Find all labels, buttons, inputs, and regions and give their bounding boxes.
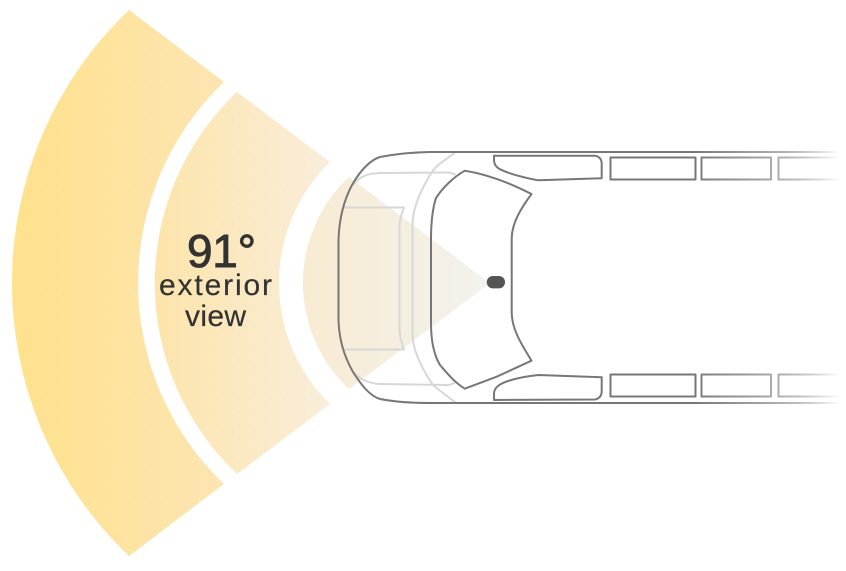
body outline fade xyxy=(700,152,840,403)
label: 91 degrees exterior view xyxy=(159,225,272,333)
bottom side windows xyxy=(610,374,840,396)
body outline xyxy=(338,152,700,403)
middle view band xyxy=(155,92,330,474)
label: 91 degrees exterior view: 91° xyxy=(187,225,256,277)
label: 91 degrees exterior view: exterior xyxy=(159,269,272,302)
windshield xyxy=(431,171,532,389)
camera dot xyxy=(487,276,505,288)
light interior lines xyxy=(345,154,455,402)
bottom mirror panel xyxy=(494,375,602,400)
label: 91 degrees exterior view: view xyxy=(185,300,246,333)
inner view cone xyxy=(303,177,490,389)
top side windows xyxy=(610,158,840,180)
vehicle outline xyxy=(338,152,840,403)
outer view band xyxy=(12,10,224,556)
top mirror panel xyxy=(494,156,602,180)
